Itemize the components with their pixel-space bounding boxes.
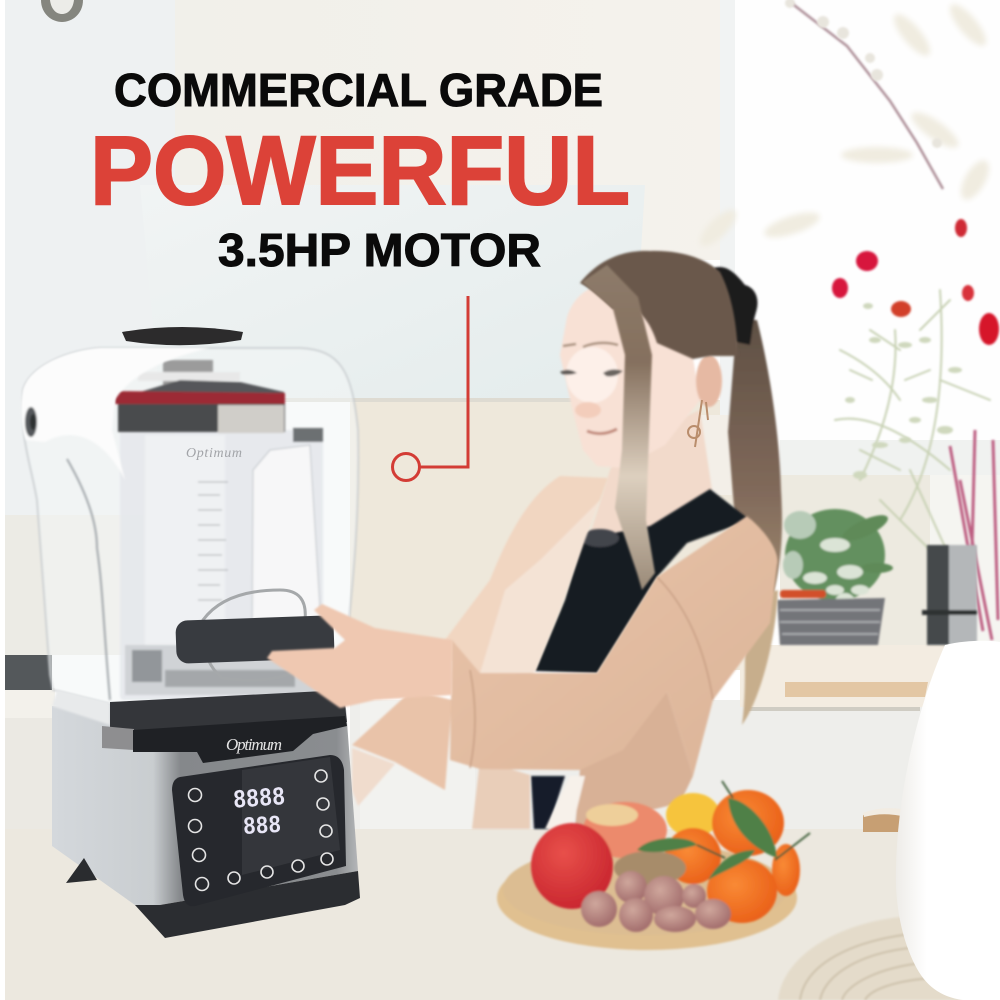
- panel buttons: [188, 770, 333, 890]
- earring: [688, 400, 708, 447]
- neck: [590, 410, 712, 540]
- potted plant: [777, 509, 893, 645]
- base bottom trim: [135, 871, 360, 938]
- enclosure reflection and shoulder: [21, 348, 210, 725]
- callout line: [392, 296, 468, 480]
- thermos: [922, 545, 977, 645]
- main sleeve: [450, 516, 778, 776]
- brand logo: Optimum: [226, 735, 282, 754]
- cardigan lower right: [575, 692, 693, 829]
- tangerine middle: [665, 828, 721, 884]
- ceiling lamp fragment: [41, 0, 83, 22]
- tangerine back top: [712, 790, 784, 856]
- apple highlight: [586, 804, 638, 826]
- heading: motor: 3.5HP MOTOR: [218, 224, 541, 276]
- digital display: [232, 782, 286, 842]
- base foot notch: [66, 858, 97, 883]
- face: [560, 285, 722, 468]
- upper base band: [110, 690, 347, 733]
- far forearm: [352, 748, 395, 806]
- heading: commercial grade: COMMERCIAL GRADE: [114, 64, 603, 116]
- logo band: [133, 716, 347, 763]
- jar logo: Optimum: [186, 446, 242, 461]
- wooden plate: [497, 843, 797, 950]
- lemon: [666, 793, 720, 837]
- jar pitcher: [120, 428, 325, 700]
- far sleeve lapel: [352, 476, 778, 829]
- digital display: 888: [242, 811, 282, 842]
- leaves: [637, 798, 777, 880]
- heading: powerful: POWERFUL: [90, 116, 630, 225]
- lychees: [581, 871, 731, 932]
- white lining: [545, 776, 585, 829]
- inner lamp lens: [50, 0, 74, 14]
- red apple: [531, 823, 613, 909]
- table top: [5, 829, 1000, 1000]
- wooden coaster: [863, 808, 902, 832]
- control panel: [172, 755, 346, 906]
- woman: [352, 251, 782, 829]
- woven mat: [778, 917, 960, 1000]
- sound enclosure back: [22, 348, 358, 704]
- jar lid: [115, 360, 285, 433]
- black top: [531, 489, 750, 829]
- front hair strand: [582, 265, 655, 590]
- digital display: 8888: [232, 782, 286, 816]
- display reflection: [242, 757, 340, 875]
- tangerine front: [707, 859, 777, 923]
- blender: [21, 327, 360, 938]
- tangerine right: [772, 844, 800, 896]
- kiwi: [614, 851, 686, 885]
- pampas and flower arrangement: [695, 0, 999, 640]
- ponytail: [714, 267, 782, 725]
- hand reaching: [267, 604, 452, 708]
- fruit plate: [497, 781, 810, 950]
- pale apple: [583, 802, 667, 858]
- gap behind neck: [700, 415, 732, 495]
- cardigan front: [472, 760, 530, 829]
- enclosure lid cap: [122, 327, 243, 345]
- far arm sleeve: [352, 690, 452, 790]
- base body: [52, 695, 358, 905]
- handle grip: [175, 615, 335, 664]
- handle loop: [203, 590, 305, 680]
- steel trim: [102, 726, 134, 750]
- hair crown: [580, 251, 738, 359]
- white vase: [896, 641, 1000, 1000]
